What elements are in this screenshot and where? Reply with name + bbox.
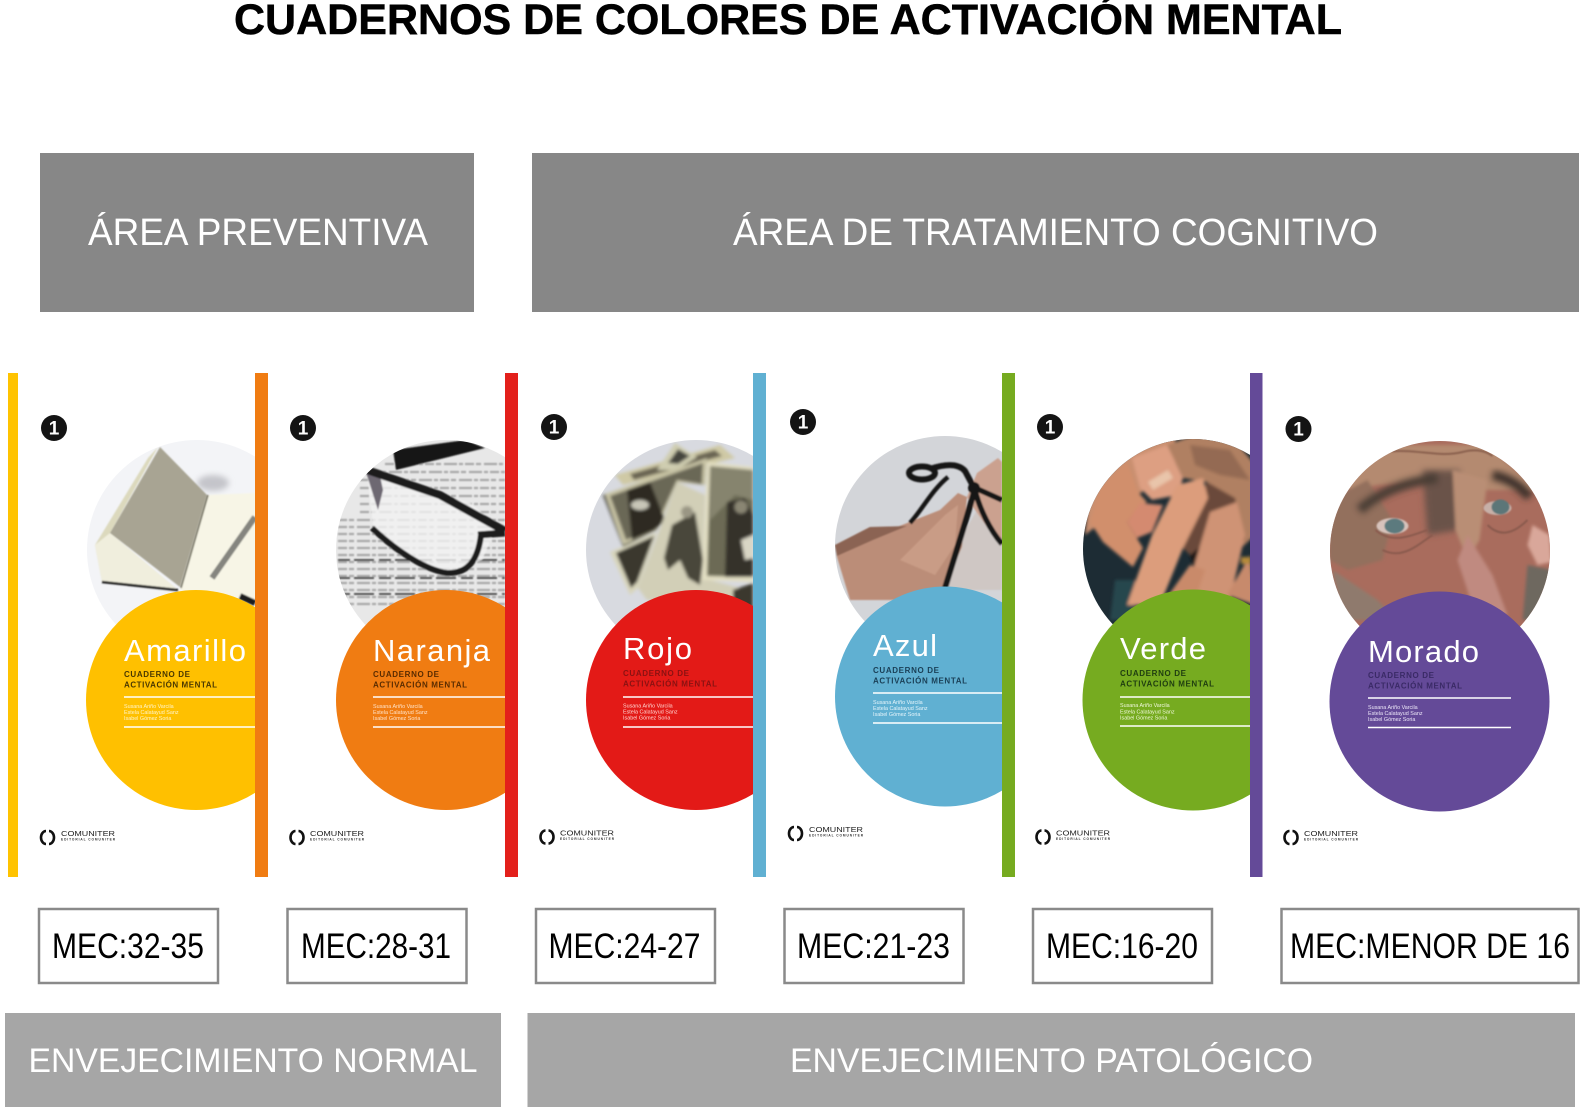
- cover subtitle: CUADERNO DE: [873, 666, 940, 675]
- badge: volume 1: 1: [1293, 420, 1304, 440]
- color circle: [835, 586, 1002, 806]
- badge: volume 1: 1: [1045, 418, 1056, 438]
- cover subtitle: ACTIVACIÓN MENTAL: [1368, 682, 1462, 690]
- badge: volume 1: [1037, 414, 1063, 440]
- photo: old photographs: [586, 440, 753, 625]
- logo: Comuniter: EDITORIAL COMUNITER: [809, 834, 864, 838]
- photo: glasses on newspaper: [336, 440, 505, 625]
- cover authors: [873, 700, 928, 716]
- cover subtitle: [873, 667, 967, 684]
- cover authors: Estela Calatayud Sanz: [1120, 710, 1175, 716]
- MEC score box: 21-23: MEC:21-23: [797, 927, 950, 966]
- spine: orange: [255, 373, 268, 877]
- MEC score box: 16-20: MEC:16-20: [1046, 927, 1198, 966]
- cover authors: [623, 704, 678, 720]
- cover title: Naranja: [373, 633, 491, 668]
- logo: Comuniter: EDITORIAL COMUNITER: [1304, 838, 1359, 842]
- cover authors: [373, 704, 428, 720]
- cover subtitle: CUADERNO DE: [1120, 669, 1187, 678]
- cover subtitle: ACTIVACIÓN MENTAL: [873, 676, 967, 686]
- cover authors: Isabel Gómez Soria: [873, 712, 920, 718]
- color circle: [1082, 590, 1250, 810]
- cover authors: Estela Calatayud Sanz: [373, 710, 428, 716]
- cover authors: Estela Calatayud Sanz: [623, 710, 678, 716]
- badge: volume 1: 1: [49, 418, 60, 440]
- MEC score box: 32-35: [39, 909, 218, 983]
- logo: Comuniter: [290, 829, 365, 844]
- panel: envejecimiento normal: ENVEJECIMIENTO NORMAL: [28, 1042, 478, 1080]
- logo: Comuniter: COMUNITER: [1056, 828, 1111, 838]
- cover authors: [1368, 705, 1422, 721]
- cover subtitle: CUADERNO DE: [1368, 671, 1435, 680]
- panel: envejecimiento patológico: [528, 1013, 1575, 1107]
- logo: Comuniter: EDITORIAL COMUNITER: [1056, 837, 1111, 841]
- badge: volume 1: [790, 409, 816, 435]
- cover subtitle: ACTIVACIÓN MENTAL: [124, 680, 217, 690]
- cover authors: Estela Calatayud Sanz: [124, 710, 179, 716]
- cover subtitle: [124, 671, 217, 688]
- cover authors: Susana Ariño Varcila: [373, 704, 423, 710]
- spine: yellow: [8, 373, 18, 877]
- cover title: Amarillo: [124, 633, 246, 668]
- panel: área de tratamiento cognitivo: [532, 153, 1579, 312]
- cover title: Verde: [1120, 631, 1206, 666]
- spine: green: [1002, 373, 1015, 877]
- cover title: Azul: [873, 628, 937, 663]
- logo: Comuniter: COMUNITER: [61, 829, 116, 838]
- cover authors: Isabel Gómez Soria: [373, 716, 420, 722]
- cover authors: Isabel Gómez Soria: [1120, 716, 1167, 722]
- logo: Comuniter: COMUNITER: [310, 829, 365, 838]
- MEC score box: 24-27: [536, 909, 715, 983]
- logo: Comuniter: [540, 828, 615, 844]
- color circle: [586, 590, 753, 810]
- panel: área preventiva: ÁREA PREVENTIVA: [88, 211, 429, 254]
- cover authors: [1120, 703, 1174, 720]
- cover authors: Susana Ariño Varcila: [1368, 705, 1418, 711]
- panel: envejecimiento normal: [5, 1013, 501, 1107]
- color circle: [336, 590, 505, 810]
- cover title: Rojo: [623, 631, 692, 666]
- logo: Comuniter: EDITORIAL COMUNITER: [560, 837, 615, 841]
- logo: Comuniter: COMUNITER: [1304, 829, 1359, 838]
- MEC score box: menor de 16: [1282, 909, 1578, 983]
- cover subtitle: ACTIVACIÓN MENTAL: [1120, 680, 1214, 688]
- photo: elderly face: [1330, 441, 1550, 626]
- book: Morado: [1250, 373, 1552, 877]
- cover subtitle: CUADERNO DE: [124, 670, 191, 679]
- color circle: [1330, 592, 1550, 812]
- logo: Comuniter: EDITORIAL COMUNITER: [61, 838, 116, 842]
- cover subtitle: ACTIVACIÓN MENTAL: [623, 680, 717, 688]
- logo: Comuniter: [1036, 828, 1111, 844]
- logo: Comuniter: EDITORIAL COMUNITER: [310, 838, 365, 842]
- cover subtitle: [623, 670, 717, 686]
- badge: volume 1: [41, 415, 67, 441]
- book: Azul: [753, 373, 1002, 877]
- panel: área de tratamiento cognitivo: ÁREA DE TRATAMIENTO COGNITIVO: [733, 211, 1378, 254]
- cover authors: [124, 704, 178, 720]
- MEC score box: 28-31: MEC:28-31: [301, 927, 451, 966]
- book: Rojo: [505, 373, 753, 877]
- color circle: [86, 590, 255, 810]
- MEC score box: 28-31: [288, 909, 466, 983]
- badge: volume 1: [1286, 416, 1312, 442]
- logo: Comuniter: COMUNITER: [560, 828, 615, 838]
- spine: red: [505, 373, 518, 877]
- badge: volume 1: [290, 415, 316, 441]
- cover authors: Susana Ariño Varcila: [124, 704, 174, 710]
- MEC score box: 32-35: MEC:32-35: [52, 927, 204, 966]
- cover subtitle: CUADERNO DE: [373, 670, 440, 679]
- badge: volume 1: 1: [798, 412, 809, 434]
- logo: Comuniter: [1284, 829, 1359, 844]
- book: Verde: [1002, 373, 1250, 877]
- cover authors: Susana Ariño Varcila: [623, 704, 673, 710]
- logo: Comuniter: [789, 825, 864, 840]
- badge: volume 1: 1: [298, 418, 309, 440]
- cover authors: Susana Ariño Varcila: [1120, 703, 1170, 709]
- cover authors: Estela Calatayud Sanz: [1368, 711, 1423, 717]
- panel: área preventiva: [40, 153, 474, 312]
- badge: volume 1: 1: [549, 418, 560, 438]
- MEC score box: 21-23: [784, 909, 964, 983]
- cover subtitle: CUADERNO DE: [623, 669, 690, 678]
- book: Naranja: [255, 373, 505, 877]
- cover title: Morado: [1368, 634, 1479, 669]
- cover authors: Isabel Gómez Soria: [1368, 717, 1415, 723]
- logo: Comuniter: COMUNITER: [809, 825, 864, 834]
- spine: purple: [1250, 373, 1262, 877]
- cover subtitle: ACTIVACIÓN MENTAL: [373, 680, 467, 690]
- cover authors: Susana Ariño Varcila: [873, 700, 923, 706]
- cover subtitle: [1368, 672, 1462, 688]
- panel: envejecimiento patológico: ENVEJECIMIENTO PATOLÓGICO: [790, 1042, 1313, 1080]
- logo: Comuniter: [41, 829, 116, 844]
- MEC score box: 24-27: MEC:24-27: [548, 927, 700, 966]
- cover authors: Isabel Gómez Soria: [124, 716, 171, 722]
- photo: elderly hands: [1083, 439, 1250, 624]
- cover subtitle: [373, 671, 467, 688]
- book: Amarillo: [8, 373, 255, 877]
- MEC score box: 16-20: [1033, 909, 1212, 983]
- spine: blue: [753, 373, 766, 877]
- cover subtitle: [1120, 670, 1214, 686]
- cover authors: Isabel Gómez Soria: [623, 716, 670, 722]
- photo: notebook and pen: [87, 440, 255, 624]
- badge: volume 1: [541, 414, 567, 440]
- cover authors: Estela Calatayud Sanz: [873, 706, 928, 712]
- photo: string tied around a finger: [835, 436, 1002, 622]
